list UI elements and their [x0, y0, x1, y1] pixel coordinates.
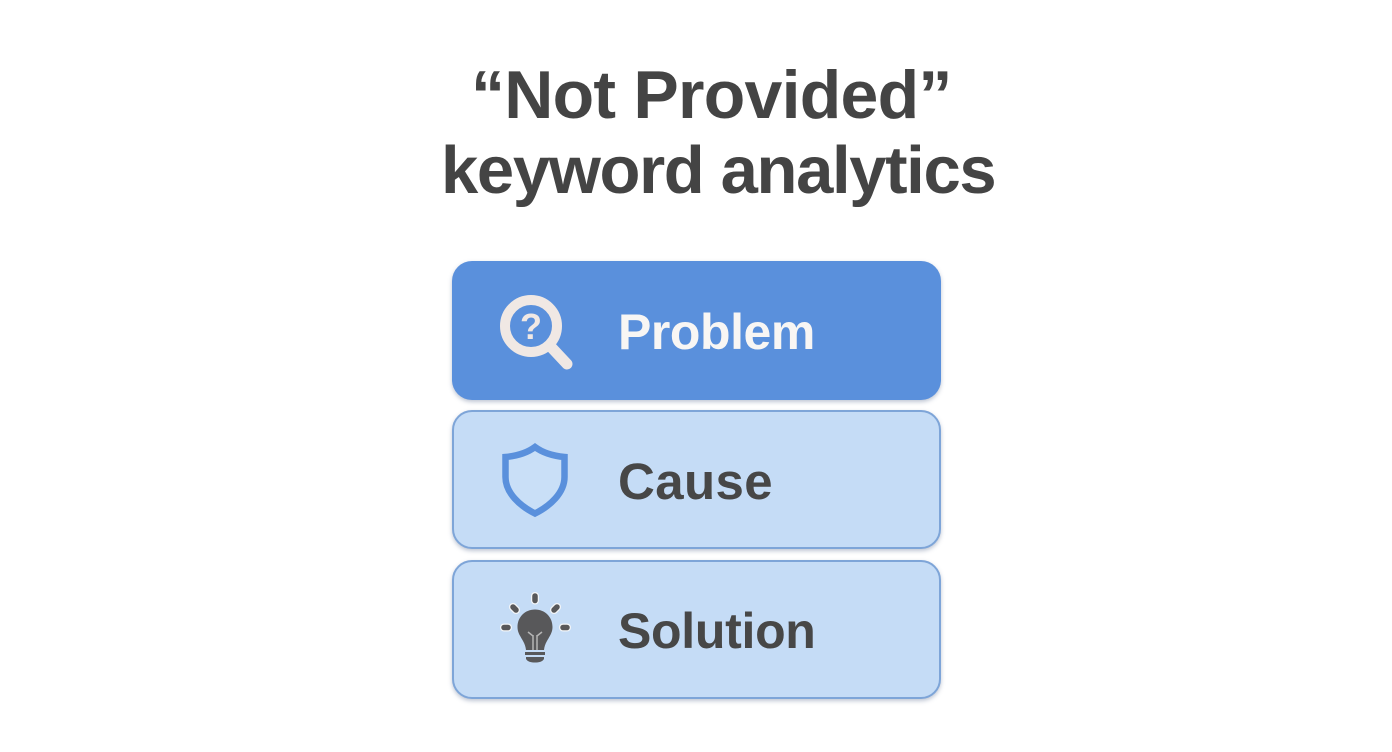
problem label: Problem	[618, 304, 815, 360]
problem card background	[452, 261, 941, 400]
cause card background	[452, 410, 941, 549]
panel: solution	[450, 560, 944, 704]
cause label: Cause	[618, 453, 773, 510]
icon: magnifying glass with question mark: ?	[520, 306, 542, 347]
icon: lightbulb	[500, 592, 571, 662]
icon: shield	[502, 443, 568, 517]
icon: magnifying glass with question mark	[500, 295, 572, 370]
panel: problem	[450, 260, 944, 404]
title	[441, 57, 995, 208]
title line 2: keyword analytics	[441, 133, 995, 208]
title line 1: “Not Provided”	[471, 57, 952, 133]
solution card background	[452, 560, 941, 699]
solution label: Solution	[618, 603, 816, 659]
panel: cause	[450, 410, 944, 554]
